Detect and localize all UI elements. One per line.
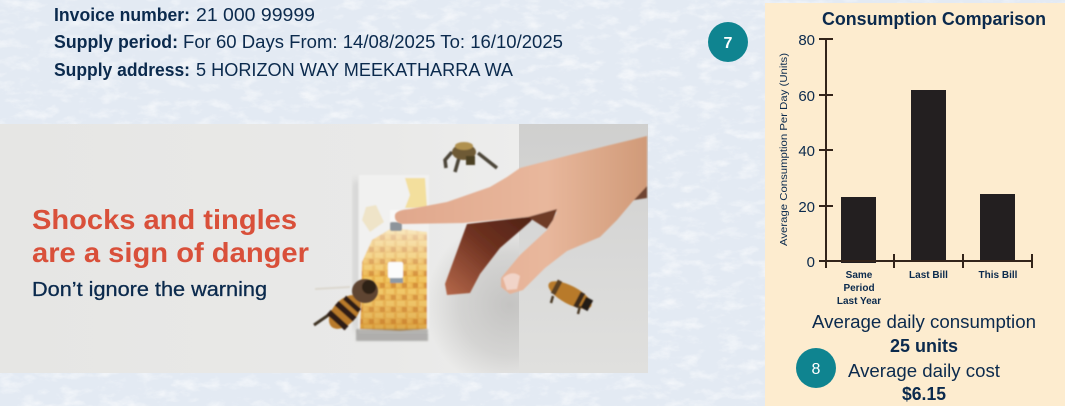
y axis title: Average Consumption Per Day (Units) [778,53,790,246]
banner heading: Shocks and tingles [32,204,297,235]
icon: light switch with honeycomb [353,175,429,341]
supply address line: Supply address: [54,60,190,80]
bar chart [778,32,1033,307]
x axis labels: Last Bill [909,270,948,281]
supply period line: For 60 Days From: 14/08/2025 To: 16/10/2025 [183,32,563,52]
wrist shadow [634,186,647,200]
banner subheading: Don’t ignore the warning [32,279,267,301]
number badge 7 [708,22,748,62]
number badge 7: 7 [724,35,733,52]
y axis tick labels: 80 [798,32,815,49]
invoice number line [54,5,315,25]
icon: bee top [445,142,497,172]
y axis tick labels [798,32,815,271]
number badge 8: 8 [812,361,821,378]
invoice details text block [54,5,563,80]
average daily consumption: Average daily consumption [812,312,1036,332]
y axis tick labels: 60 [798,88,815,105]
banner heading: are a sign of danger [32,237,309,268]
banner heading [32,204,309,268]
x axis labels: This Bill [979,270,1018,281]
average daily cost: $6.15 [902,384,946,404]
x axis labels: Same [846,270,873,281]
shadow between fingers [528,209,557,229]
y axis tick labels: 40 [798,143,815,160]
average daily cost: Average daily cost [848,361,1000,381]
number badge 8 [796,348,836,388]
supply period line: Supply period: [54,32,178,52]
x axis labels: Last Year [837,296,881,307]
chart title: Consumption Comparison [822,9,1046,29]
bars [841,90,1015,263]
fingernail [503,273,520,290]
shaded middle finger [445,216,535,295]
x axis labels: Period [843,283,875,294]
icon: hand pressing switch [395,136,647,295]
average daily cost [848,361,1000,404]
icon: bee lower right [545,276,595,314]
invoice number line: 21 000 99999 [196,5,315,25]
index finger, palm and ring finger [395,136,647,294]
icon: bee lower left [314,279,378,335]
average daily consumption: 25 units [890,336,958,356]
y axis tick labels: 0 [807,254,815,271]
y axis tick labels: 20 [798,199,815,216]
average daily consumption [812,312,1036,356]
axes [819,38,1033,268]
invoice number line: Invoice number: [54,5,190,25]
panel: consumption comparison [765,3,1065,406]
supply address line: 5 HORIZON WAY MEEKATHARRA WA [196,60,513,80]
x axis labels [837,270,1018,307]
supply address line [54,60,513,80]
panel: safety banner [0,124,648,390]
